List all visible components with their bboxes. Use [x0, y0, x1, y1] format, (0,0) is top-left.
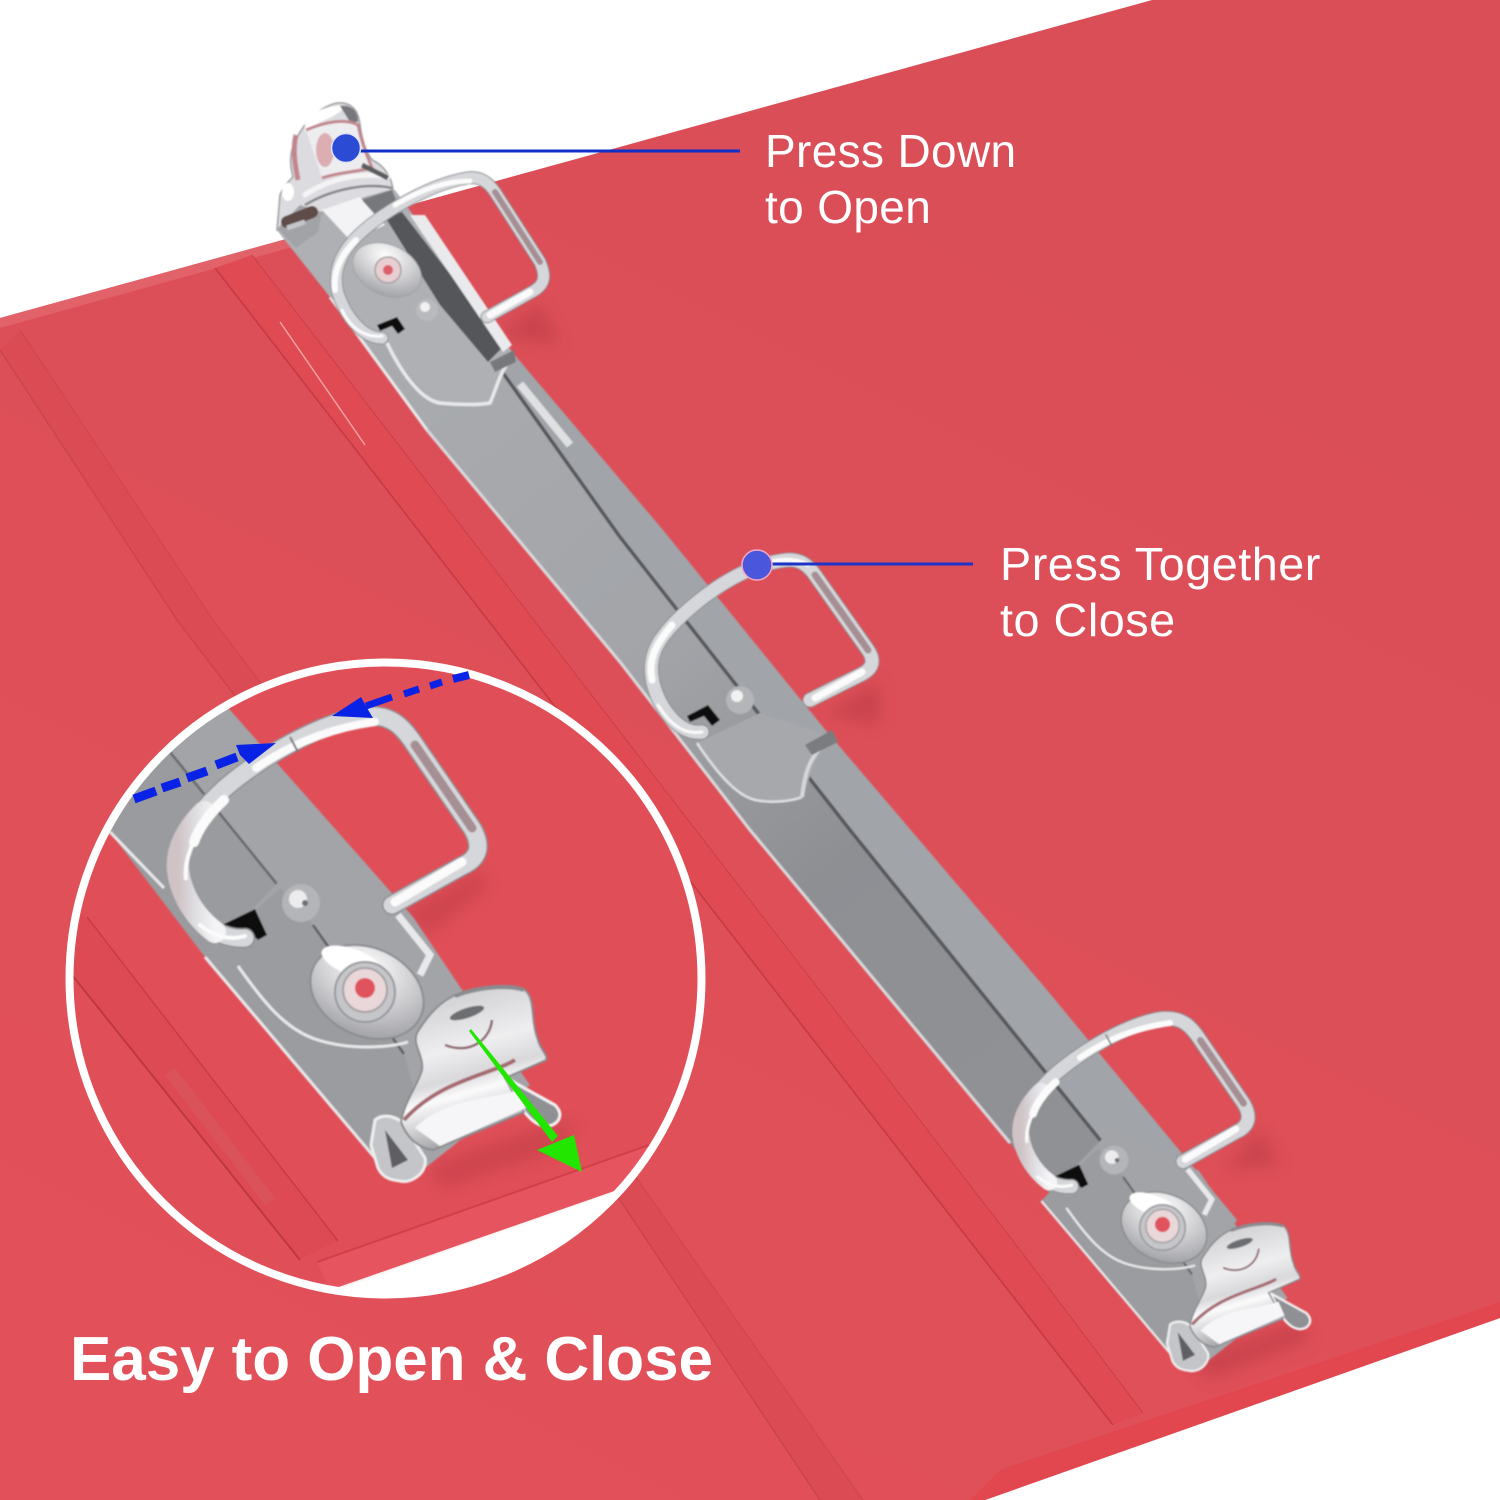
left fold strip: [0, 330, 863, 1500]
bottom ring and lever assembly: [1021, 1018, 1310, 1371]
inset circle outline: [70, 662, 702, 1294]
slot: [377, 317, 405, 334]
metal bar: right strip: [403, 210, 1237, 1300]
middle clip plate: [687, 686, 838, 802]
inset soft shadows: [410, 874, 486, 932]
arrow: press together from the left: [134, 743, 276, 799]
binder mechanism: [277, 103, 1310, 1371]
arrow: press together from the right: [332, 675, 469, 718]
plate edge: [387, 343, 513, 404]
top lever head: [277, 103, 400, 248]
callout: press together marker: [742, 550, 973, 580]
cover top edge: [0, 238, 296, 328]
top clip plate: [277, 190, 516, 405]
head highlights: [305, 106, 345, 132]
callout: press together to close text: to Close: [1000, 594, 1176, 646]
mirror reflection band: [385, 212, 505, 362]
metal bar: left strip: [277, 210, 1190, 1350]
arrow: green press down: [469, 1029, 582, 1172]
callout: press down to open text: to Open: [765, 181, 931, 233]
inset: zoomed lever detail: [66, 658, 706, 1298]
bar left edge highlight: [427, 430, 1010, 1143]
callout: press down marker: [332, 134, 740, 162]
inset metal bar: [170, 708, 413, 918]
middle ring: [651, 560, 872, 733]
cover bottom edge band: [970, 1302, 1500, 1500]
rivet: [344, 232, 430, 308]
callout: press together to close text: Press Together: [1000, 538, 1321, 590]
top ring: [335, 178, 544, 338]
inset background: [240, 690, 676, 1164]
callout: press down to open text: Press Down: [765, 125, 1016, 177]
second fold strip: [215, 255, 1143, 1425]
title: Easy to Open & Close: [70, 1325, 713, 1394]
inset ring and lever: [178, 716, 560, 1181]
inset fold strip: [60, 905, 338, 1260]
white surface below cover: [326, 1191, 614, 1290]
shadows beneath binder: [500, 305, 1310, 1380]
groove: [503, 373, 1130, 1177]
